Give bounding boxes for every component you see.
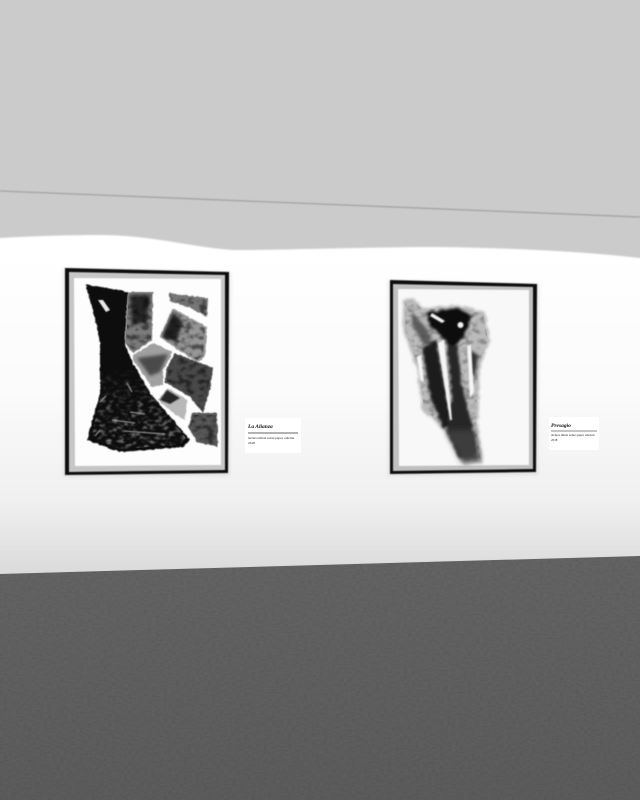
- dark left strand: [422, 340, 452, 428]
- fragment dark mottling: [126, 294, 216, 445]
- ceiling: [0, 0, 640, 262]
- artwork frame: left: [63, 268, 231, 477]
- lower shard mottling: [91, 370, 186, 449]
- wall label: right: [549, 417, 599, 450]
- pale streaks in lower shard: [95, 383, 165, 436]
- abstract print: fractured shapes: [85, 284, 218, 452]
- top right fragment: [169, 293, 208, 317]
- wall label: left: [245, 418, 301, 453]
- pale outer wash: [403, 298, 490, 465]
- dark left wisps: [412, 312, 432, 345]
- grey mat: [69, 272, 225, 472]
- gallery scene: [0, 190, 640, 800]
- label rule: [551, 430, 597, 432]
- white paper: [74, 278, 221, 466]
- dark right strand: [470, 350, 478, 375]
- label rule: [248, 432, 298, 434]
- white slits: [417, 313, 474, 420]
- label caption: técnica mixta sobre papel, edición: [551, 433, 595, 438]
- small lower fragment: [158, 388, 187, 420]
- wash mottling: [405, 300, 488, 463]
- white paper: [398, 289, 529, 466]
- label caption second line: 2018: [551, 438, 558, 442]
- artwork frame: right: [388, 280, 539, 476]
- label title: La Alianza: [247, 424, 273, 430]
- bottom right fragment: [188, 413, 218, 447]
- black head: [426, 308, 472, 352]
- soft grey lower mass: [446, 430, 480, 462]
- floor: [0, 556, 640, 800]
- black frame: [390, 280, 537, 474]
- abstract print: vertical ink form: [403, 298, 490, 465]
- right middle fragment: [165, 353, 213, 413]
- centre fragment: [133, 343, 173, 387]
- frame soft shadow: [63, 268, 231, 477]
- frame soft shadow: [388, 280, 539, 476]
- lit wall: [0, 235, 640, 575]
- large black shard: [85, 284, 190, 452]
- label title: Presagio: [551, 423, 571, 429]
- grey mat: [393, 284, 533, 471]
- dark centre strand: [447, 345, 476, 458]
- black frame: [65, 268, 229, 475]
- ceiling seam line: [0, 191, 640, 217]
- label caption second line: 2018: [248, 441, 255, 445]
- upper grey fragment: [125, 292, 153, 353]
- second right fragment: [160, 308, 207, 362]
- highlight in black shard: [98, 300, 110, 312]
- label caption: técnica mixta sobre papel, edición: [248, 436, 295, 441]
